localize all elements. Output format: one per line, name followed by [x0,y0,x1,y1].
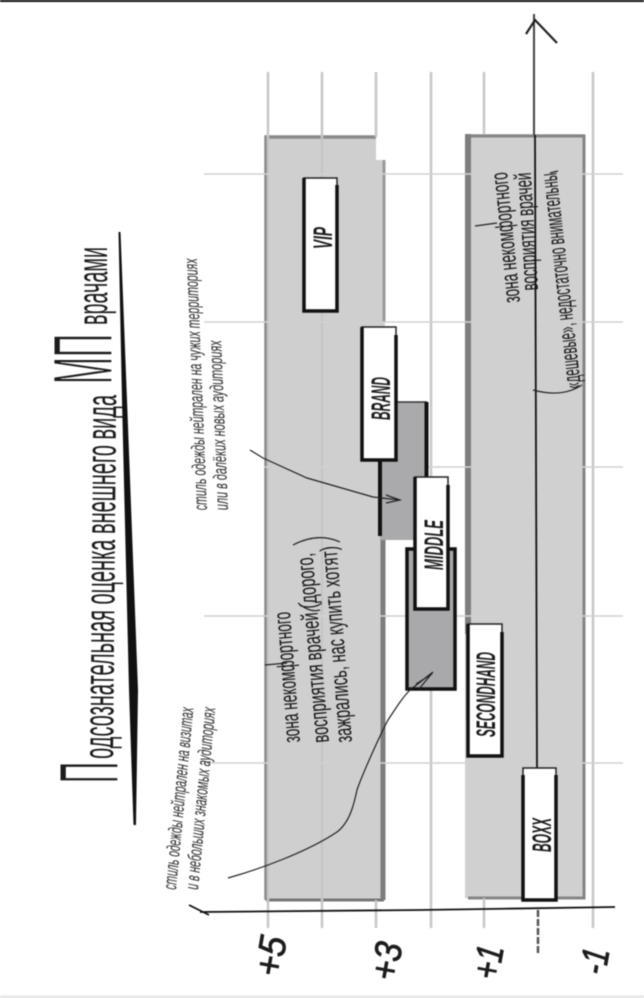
note: lower annotation: стиль одежды нейтрален на визитах [160,706,199,890]
grid lines [204,72,623,928]
tick label: -1: -1 [573,945,618,978]
box: overlap zone upper [380,402,427,540]
text block: right zone label: восприятия врачей [510,172,544,291]
axis: horizontal scale with arrow [526,14,557,955]
title [36,232,138,825]
box: SECONDHAND: SECONDHAND [471,652,501,737]
title: врачами [69,247,117,325]
box: BOXX [523,768,557,900]
arrow head [526,20,557,43]
title: МП [36,334,130,384]
note: lower annotation [160,705,221,890]
box: SECONDHAND [468,624,502,756]
panel: comfort zone left band (+3 to +5) [265,137,385,900]
note: upper annotation [181,257,233,511]
text block: left zone label: восприятия врачей (дорого, [292,552,335,744]
title underline [118,232,138,825]
box: VIP: VIP [308,227,338,249]
note: upper annotation: стиль одежды нейтрален на чужих территориях [181,257,212,511]
box: MIDDLE [415,477,449,609]
note: lower annotation: и в небольших знакомых аудиториях [182,705,221,890]
note: upper annotation: или в далёких новых аудиториях [205,339,233,511]
box: VIP [304,178,338,311]
arrow: lower annotation to overlap zone [228,672,433,878]
arrow: upper annotation to overlap zone [250,450,400,503]
box: BRAND: BRAND [366,377,396,420]
box: MIDDLE: MIDDLE [419,520,449,570]
text block: left zone label [265,538,358,744]
leader line and bracket [475,171,582,393]
text block: left zone label: зажрались, нас купить хотят) [316,545,358,744]
axis: vertical baseline [189,905,615,915]
tick label: +1: +1 [466,942,513,983]
box: overlap zone lower [407,549,455,689]
panel: uncomfortable zone right band (-1 to +1) [465,134,584,898]
text block: right zone label [475,171,587,393]
box: BOXX: BOXX [527,817,557,852]
tick label: +3: +3 [364,939,411,984]
title: П [42,762,136,783]
box: BRAND [362,327,396,460]
text block: right zone label: зона некомфортного [486,171,526,304]
leader line [265,538,340,665]
tick label: +5: +5 [248,932,296,980]
text block: left zone label: зона некомфортного [269,611,306,744]
